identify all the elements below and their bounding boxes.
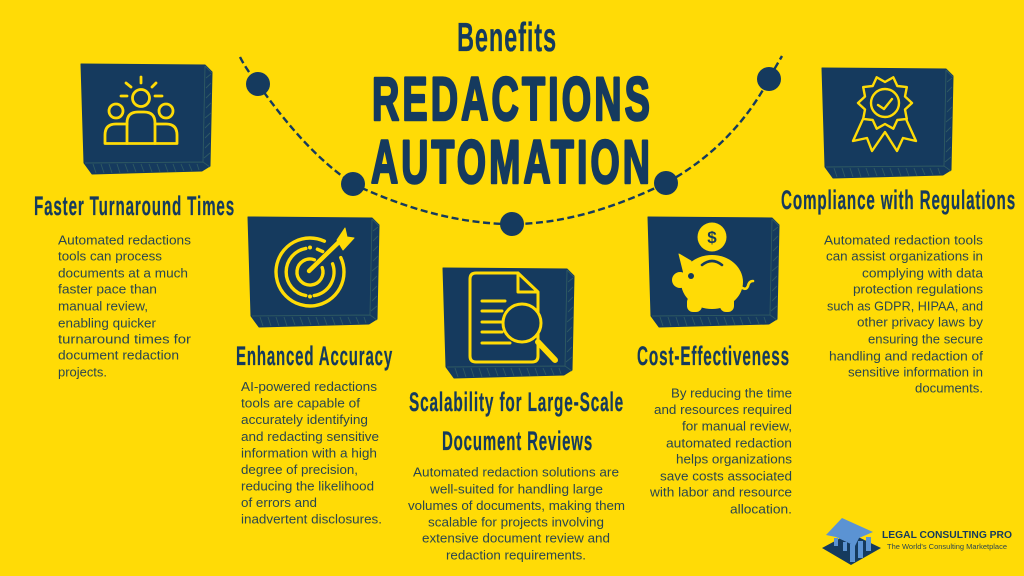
text block: extensive document review and	[422, 532, 610, 546]
text block: save costs associated	[660, 470, 792, 484]
heading: Document Reviews	[442, 426, 593, 456]
text block: documents at a much	[58, 266, 188, 280]
text block: redaction requirements.	[446, 548, 586, 562]
text block	[241, 380, 382, 526]
title	[371, 14, 653, 196]
icon: document with magnifier on navy box	[443, 268, 574, 378]
brand name: LEGAL CONSULTING PRO	[882, 529, 1012, 541]
text block	[824, 234, 984, 396]
text block	[649, 386, 792, 516]
icon: award rosette on navy box	[822, 68, 953, 178]
text block: faster pace than	[58, 282, 157, 296]
text block: inadvertent disclosures.	[241, 512, 382, 526]
icon: team with sun on navy box	[81, 64, 212, 174]
heading: Faster Turnaround Times	[34, 191, 235, 221]
heading: Enhanced Accuracy	[236, 341, 393, 371]
icon: courthouse	[822, 518, 881, 565]
text block: volumes of documents, making them	[408, 499, 625, 513]
text block: manual review,	[58, 300, 148, 314]
icon: piggy bank with coin on navy box	[648, 217, 779, 327]
text block: documents.	[915, 382, 983, 396]
text block: accurately identifying	[241, 413, 368, 427]
text block: protection regulations	[853, 282, 983, 296]
text block: Automated redaction solutions are	[413, 466, 619, 480]
heading: Cost-Effectiveness	[637, 341, 790, 371]
text block: allocation.	[730, 502, 792, 516]
text block: information with a high	[241, 446, 377, 460]
text block: ensuring the secure	[868, 332, 983, 346]
text block: and resources required	[654, 403, 792, 417]
panel: faster turnaround times	[34, 64, 235, 380]
text block: well-suited for handling large	[429, 482, 603, 496]
text block: helps organizations	[676, 452, 792, 466]
title: REDACTIONS	[372, 65, 653, 133]
text block: for manual review,	[682, 420, 792, 434]
text block: projects.	[58, 366, 107, 380]
text block: sensitive information in	[848, 366, 983, 380]
text block	[58, 234, 191, 380]
title: AUTOMATION	[371, 128, 653, 196]
text block: turnaround times for	[58, 332, 191, 346]
text block: handling and redaction of	[829, 350, 984, 364]
text block: By reducing the time	[671, 386, 792, 400]
text block: scalable for projects involving	[428, 516, 604, 530]
text block: other privacy laws by	[857, 316, 984, 330]
panel: cost-effectiveness	[637, 217, 792, 516]
tagline: The World's Consulting Marketplace	[887, 542, 1007, 551]
dashed timeline curve with dots	[240, 56, 782, 236]
text block	[408, 466, 625, 562]
text block: Automated redaction tools	[824, 234, 983, 248]
heading	[409, 387, 624, 456]
text block: enabling quicker	[58, 316, 156, 330]
text block: AI-powered redactions	[241, 380, 377, 394]
icon: target with arrow on navy box	[248, 217, 379, 327]
heading: Scalability for Large-Scale	[409, 387, 624, 417]
panel: enhanced accuracy	[236, 217, 393, 526]
text block: tools can process	[58, 250, 162, 264]
text block: of errors and	[241, 496, 317, 510]
text block: Automated redactions	[58, 234, 191, 248]
text block: reducing the likelihood	[241, 480, 374, 494]
panel: compliance with regulations	[781, 68, 1016, 396]
text block: such as GDPR, HIPAA, and	[827, 300, 983, 314]
text block: degree of precision,	[241, 463, 358, 477]
text block: with labor and resource	[649, 486, 792, 500]
text block: document redaction	[58, 348, 179, 362]
text block: and redacting sensitive	[241, 430, 379, 444]
text block: complying with data	[862, 266, 983, 280]
panel: scalability	[408, 268, 625, 562]
text block: automated redaction	[666, 436, 792, 450]
icon: piggy bank with coin on navy box: $	[707, 228, 717, 247]
title: Benefits	[457, 14, 557, 60]
logo: legal consulting pro	[822, 518, 1012, 565]
text block: tools are capable of	[241, 396, 361, 410]
text block: can assist organizations in	[826, 250, 983, 264]
